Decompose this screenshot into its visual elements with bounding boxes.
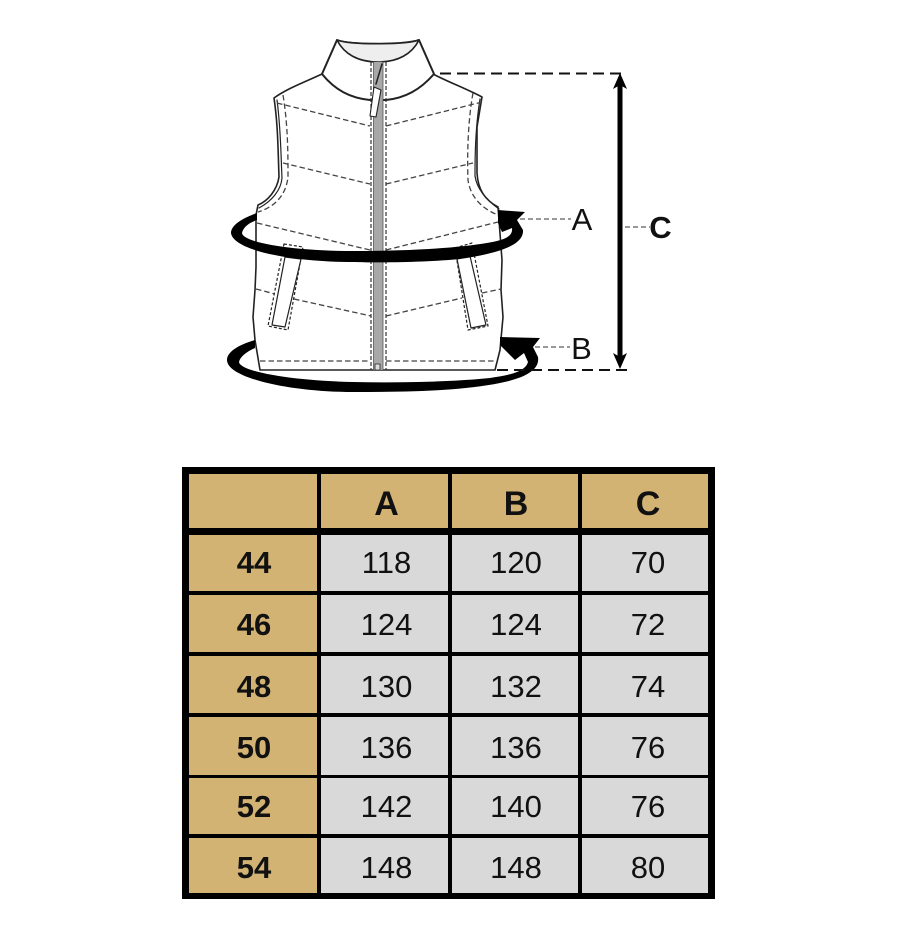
collar — [322, 40, 434, 100]
header row: B — [504, 484, 528, 522]
row 48 — [189, 656, 708, 713]
pockets — [268, 243, 488, 330]
row 48: 132 — [490, 668, 542, 704]
row 46: 46 — [237, 606, 271, 642]
row 46: 124 — [361, 606, 412, 642]
vest measurement diagram — [227, 39, 672, 392]
arrow: height C — [613, 73, 627, 369]
header row: C — [636, 484, 660, 522]
row 50: 136 — [361, 730, 412, 765]
row 44: 44 — [237, 545, 271, 580]
row 50: 50 — [237, 730, 271, 765]
row 46 — [189, 595, 708, 652]
row 52: 142 — [361, 789, 412, 824]
row 50: 136 — [490, 730, 542, 765]
header row: A — [374, 484, 399, 522]
header row — [189, 474, 708, 528]
icon: vest — [253, 40, 503, 370]
row 54: 148 — [361, 850, 412, 885]
neck opening — [337, 40, 419, 62]
row 50 — [189, 717, 708, 775]
row 48: 48 — [237, 668, 271, 704]
row 54: 54 — [237, 850, 271, 885]
row 54: 80 — [631, 850, 665, 885]
row 54 — [189, 838, 708, 893]
zipper — [370, 62, 386, 370]
row 54: 148 — [490, 850, 542, 885]
row 52: 76 — [631, 789, 665, 824]
row 48: 74 — [631, 668, 665, 704]
row 52 — [189, 778, 708, 834]
row 46: 124 — [490, 606, 542, 642]
size table — [182, 467, 715, 899]
quilting seams — [256, 93, 501, 361]
row 50: 76 — [631, 730, 665, 765]
row 52: 140 — [490, 789, 542, 824]
row 44: 118 — [362, 545, 411, 580]
row 44 — [189, 535, 708, 591]
row 44: 120 — [490, 545, 542, 580]
vest body outline — [253, 74, 503, 370]
row 48: 130 — [361, 668, 412, 704]
label C: C — [649, 210, 672, 245]
label B: B — [571, 331, 592, 366]
dimension dashed guides — [440, 74, 628, 370]
measurement loop A — [231, 210, 525, 262]
row 44: 70 — [631, 545, 665, 580]
measurement loop B — [227, 337, 540, 392]
label A: A — [572, 202, 593, 237]
row 46: 72 — [631, 606, 665, 642]
row 52: 52 — [237, 789, 271, 824]
armhole edge lines — [259, 99, 499, 209]
